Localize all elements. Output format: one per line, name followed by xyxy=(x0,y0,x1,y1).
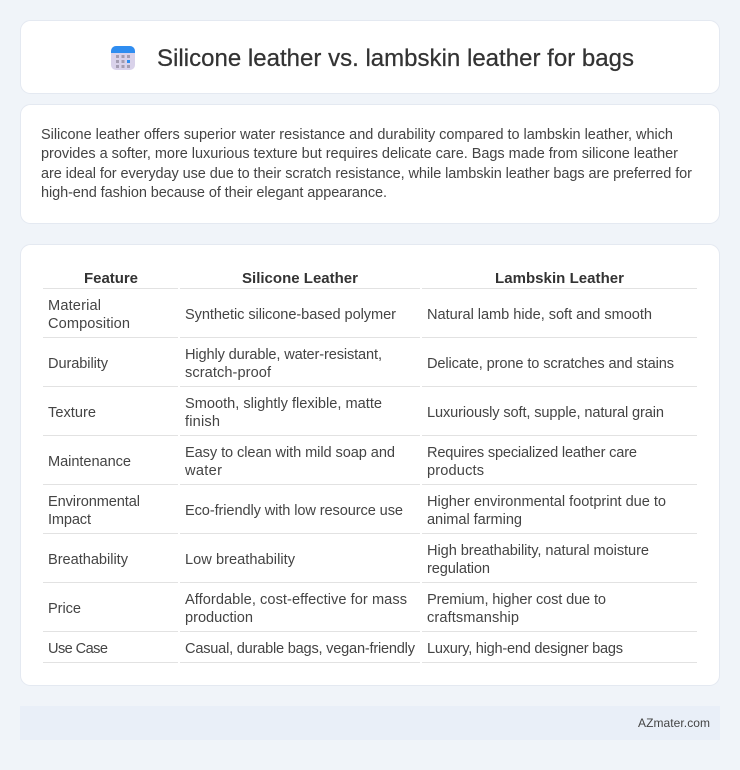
summary text: Silicone leather offers superior water resistance and durability compared to lambskin leather, which xyxy=(41,127,673,143)
row: environmental impact: animal farming xyxy=(427,512,522,528)
row: texture: Texture xyxy=(48,405,96,421)
row: breathability xyxy=(48,543,649,577)
row: breathability: Low breathability xyxy=(185,552,296,568)
row: durability: Durability xyxy=(48,356,109,372)
table header xyxy=(84,270,624,287)
row: durability xyxy=(48,347,674,381)
row: price: Affordable, cost-effective for mass xyxy=(185,592,407,608)
row: environmental impact: Impact xyxy=(48,512,91,528)
panel: summary xyxy=(20,104,720,224)
row: environmental impact xyxy=(48,494,666,528)
row: texture: Luxuriously soft, supple, natural grain xyxy=(427,405,664,421)
table header: Silicone Leather xyxy=(242,270,358,287)
footer xyxy=(20,706,720,740)
summary text: are ideal for everyday use due to their scratch resistance, while lambskin leather bags are preferred for xyxy=(41,166,692,182)
row: texture: finish xyxy=(185,414,220,430)
summary text xyxy=(41,127,692,201)
row: environmental impact: Higher environmental footprint due to xyxy=(427,494,666,510)
row: texture: Smooth, slightly flexible, matte xyxy=(185,396,382,412)
row: use case: Casual, durable bags, vegan-friendly xyxy=(185,641,416,657)
table header: Feature xyxy=(84,270,138,287)
row: material composition: Composition xyxy=(48,316,130,332)
row: maintenance: Maintenance xyxy=(48,454,131,470)
row: breathability: Breathability xyxy=(48,552,129,568)
row: material composition: Synthetic silicone-based polymer xyxy=(185,307,396,323)
title text: Silicone leather vs. lambskin leather for bags xyxy=(157,45,634,72)
row: maintenance: Easy to clean with mild soap and xyxy=(185,445,395,461)
row: breathability: regulation xyxy=(427,561,490,577)
panel: comparison table xyxy=(20,244,720,686)
row: breathability: High breathability, natural moisture xyxy=(427,543,649,559)
row: maintenance: Requires specialized leather care xyxy=(427,445,637,461)
row: durability: Delicate, prone to scratches and stains xyxy=(427,356,674,372)
row: maintenance: water xyxy=(184,463,222,479)
row: durability: Highly durable, water-resistant, xyxy=(185,347,382,363)
row: durability: scratch-proof xyxy=(185,365,272,381)
row: use case xyxy=(48,641,623,657)
icon: calendar xyxy=(111,46,135,70)
row: maintenance: products xyxy=(427,463,484,479)
row: texture xyxy=(48,396,664,430)
row: material composition: Material xyxy=(48,298,101,314)
footer credit: AZmater.com xyxy=(638,716,710,730)
panel: title xyxy=(20,20,720,94)
row: maintenance xyxy=(48,445,637,479)
row: environmental impact: Eco-friendly with low resource use xyxy=(185,503,403,519)
table header: Lambskin Leather xyxy=(495,270,624,287)
row: material composition: Natural lamb hide, soft and smooth xyxy=(427,307,652,323)
row: price: Premium, higher cost due to xyxy=(427,592,606,608)
summary text: high-end fashion because of their elegant appearance. xyxy=(41,185,387,201)
row: material composition xyxy=(48,298,652,332)
summary text: provides a softer, more luxurious texture but requires delicate care. Bags made from silicone leather xyxy=(41,146,678,162)
row: environmental impact: Environmental xyxy=(48,494,140,510)
row: use case: Use Case xyxy=(48,641,108,657)
row: price: production xyxy=(185,610,253,626)
row: price: craftsmanship xyxy=(427,610,519,626)
row: price: Price xyxy=(48,601,81,617)
row: use case: Luxury, high-end designer bags xyxy=(427,641,623,657)
row: price xyxy=(48,592,606,626)
